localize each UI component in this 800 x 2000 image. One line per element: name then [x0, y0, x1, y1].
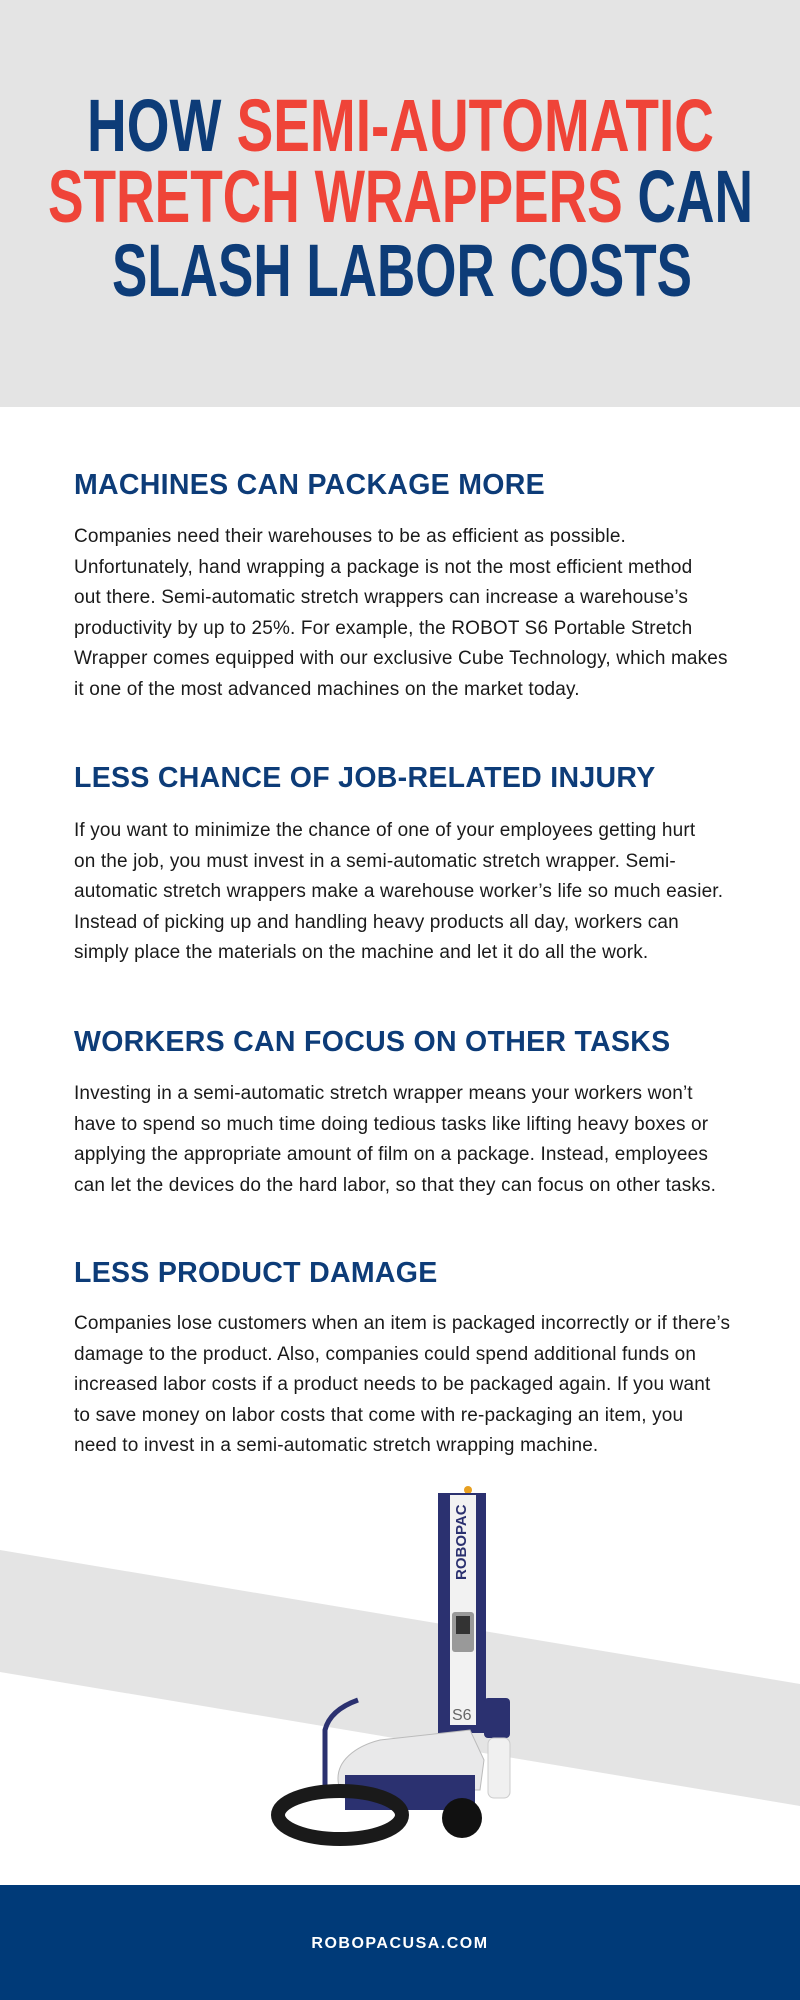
text: injury: Instead of picking up and handling heavy products all day, workers can [74, 912, 679, 933]
title [48, 84, 753, 312]
footer text: ROBOPACUSA.COM [311, 1935, 489, 1952]
text: workers [74, 1083, 716, 1196]
heading: less chance of injury: LESS CHANCE OF JOB-RELATED INJURY [74, 762, 656, 794]
text: machines [74, 526, 728, 700]
text: damage: need to invest in a semi-automatic stretch wrapping machine. [74, 1435, 598, 1456]
text: damage: to save money on labor costs that come with re-packaging an item, you [74, 1405, 683, 1426]
text: damage [74, 1313, 730, 1456]
text: injury [74, 820, 723, 963]
text: machines: out there. Semi-automatic stretch wrappers can increase a warehouse’s [74, 587, 688, 608]
text: damage: Companies lose customers when an item is packaged incorrectly or if there’s [74, 1313, 730, 1334]
image: stretch wrapper machine: ROBOPAC [453, 1504, 470, 1580]
text: workers: can let the devices do the hard labor, so that they can focus on other tasks. [74, 1175, 716, 1196]
text: workers: applying the appropriate amount of film on a package. Instead, employees [74, 1144, 708, 1165]
header panel [0, 0, 800, 407]
heading: less product damage: LESS PRODUCT DAMAGE [74, 1257, 438, 1289]
footer [0, 1885, 800, 2000]
text: injury: simply place the materials on the machine and let it do all the work. [74, 942, 648, 963]
image: stretch wrapper machine: S6 [452, 1707, 472, 1724]
text: machines: it one of the most advanced machines on the market today. [74, 679, 580, 700]
heading: workers focus: WORKERS CAN FOCUS ON OTHER TASKS [74, 1026, 670, 1058]
text: injury: on the job, you must invest in a semi-automatic stretch wrapper. Semi- [74, 851, 676, 872]
text: damage: increased labor costs if a product needs to be packaged again. If you want [74, 1374, 710, 1395]
text: machines: Wrapper comes equipped with our exclusive Cube Technology, which makes [74, 648, 728, 669]
text: workers: have to spend so much time doing tedious tasks like lifting heavy boxes or [74, 1114, 708, 1135]
text: machines: productivity by up to 25%. For example, the ROBOT S6 Portable Stretch [74, 618, 692, 639]
text: injury: automatic stretch wrappers make a warehouse worker’s life so much easier. [74, 881, 723, 902]
text: injury: If you want to minimize the chance of one of your employees getting hurt [74, 820, 695, 841]
image: stretch wrapper machine [271, 1486, 510, 1846]
text: machines: Companies need their warehouses to be as efficient as possible. [74, 526, 626, 547]
text: machines: Unfortunately, hand wrapping a package is not the most efficient method [74, 557, 692, 578]
text: damage: damage to the product. Also, companies could spend additional funds on [74, 1344, 696, 1365]
heading: machines can package more: MACHINES CAN PACKAGE MORE [74, 469, 545, 501]
text: workers: Investing in a semi-automatic stretch wrapper means your workers won’t [74, 1083, 693, 1104]
